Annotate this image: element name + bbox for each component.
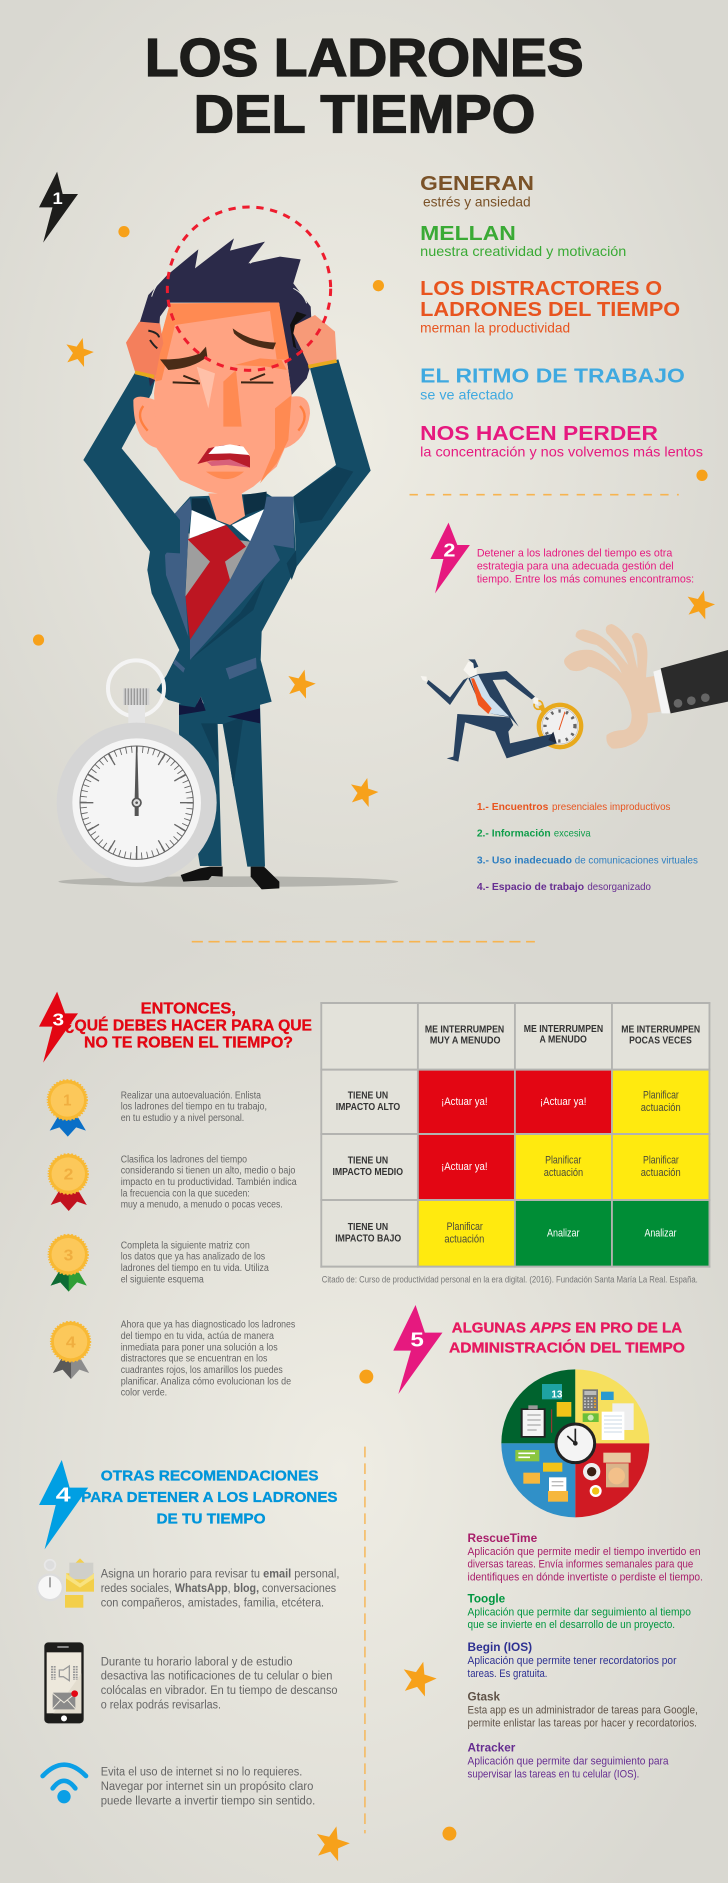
step 1 text: los ladrones del tiempo en tu trabajo,	[121, 1101, 267, 1112]
matrix column headers: ME INTERRUMPEN	[425, 1023, 504, 1035]
icon: lightning 2	[430, 523, 470, 593]
matrix row headers: IMPACTO ALTO	[336, 1101, 400, 1112]
matrix row headers: TIENE UN	[348, 1221, 388, 1232]
statement: ritmo de trabajo: se ve afectado	[420, 387, 514, 403]
list of thieves: desorganizado	[587, 881, 651, 892]
medal 4: 4	[66, 1333, 76, 1351]
statement: generan	[420, 173, 534, 210]
step 2 text: muy a menudo, a menudo o pocas veces.	[121, 1199, 283, 1210]
hands on head	[126, 312, 337, 380]
heading 4: OTRAS RECOMENDACIONES	[101, 1467, 319, 1484]
icon: lightning 2: 2	[443, 540, 455, 560]
matrix actions: Planificar	[447, 1220, 483, 1232]
tip 1 text: redes sociales, WhatsApp, blog, conversaciones	[101, 1581, 336, 1595]
vertical dashed divider	[363, 1447, 366, 1833]
heading 3	[65, 999, 312, 1052]
tip 3 text	[101, 1765, 315, 1808]
matrix column headers: ME INTERRUMPEN	[524, 1023, 603, 1034]
step 3 text	[121, 1240, 269, 1285]
decorative dots and star	[66, 226, 708, 481]
ears	[133, 396, 310, 448]
office items	[515, 1384, 634, 1502]
step 2 text: la frecuencia con la que suceden:	[121, 1188, 250, 1199]
medal 4	[51, 1322, 90, 1379]
step 1 text: en tu estudio y a nivel personal.	[121, 1113, 244, 1123]
matrix actions: actuación	[444, 1233, 484, 1245]
matrix row headers: TIENE UN	[348, 1155, 388, 1166]
stopwatch	[57, 660, 217, 883]
matrix actions: Analizar	[644, 1227, 677, 1239]
statement: mellan	[420, 223, 626, 259]
icon: watch and email	[36, 1558, 94, 1608]
matrix actions: actuación	[544, 1166, 583, 1178]
decorative stars and dot	[317, 1662, 456, 1861]
matrix column headers: A MENUDO	[540, 1034, 587, 1045]
statement: distractores	[420, 278, 680, 336]
list of thieves: 1.- Encuentros	[477, 801, 549, 812]
step 4 text	[121, 1319, 295, 1398]
section 1: title and statements	[39, 27, 708, 481]
step 4 text: color verde.	[121, 1387, 167, 1398]
step 4 text: inmediata para poner una solución a los	[121, 1342, 278, 1353]
list of thieves	[477, 801, 698, 892]
step 4 text: cuadrantes rojos, los amarillos los puedes	[121, 1365, 283, 1375]
running businessman	[421, 659, 557, 762]
icon: lightning 1	[39, 172, 78, 243]
list of thieves: excesiva	[554, 828, 591, 839]
jacket	[147, 492, 303, 723]
tip 2 text: o relax podrás revisarlas.	[101, 1698, 221, 1712]
matrix column headers	[425, 1023, 700, 1046]
icon: wifi	[43, 1765, 86, 1803]
statement: nos hacen perder	[420, 423, 703, 460]
step 4 text: Ahora que ya has diagnosticado los ladrones	[121, 1319, 295, 1330]
step 2 text: impacto en tu productividad. También indica	[121, 1177, 297, 1187]
step 2 text: considerando si tienen un alto, medio o bajo	[121, 1165, 296, 1176]
statement: generan: GENERAN	[420, 173, 534, 195]
shoes	[181, 867, 279, 889]
heading 4: PARA DETENER A LOS LADRONES	[81, 1489, 338, 1505]
matrix row headers	[332, 1090, 403, 1244]
tip 2 text	[101, 1655, 338, 1712]
section 2: common time thieves	[33, 495, 715, 942]
matrix actions: actuación	[641, 1166, 681, 1178]
step 4 text: planificar. Analiza cómo evolucionan los de	[121, 1376, 291, 1387]
statement: mellan: nuestra creatividad y motivación	[420, 244, 626, 259]
icon: lightning 5: 5	[410, 1329, 424, 1352]
icon: lightning 4: 4	[56, 1484, 71, 1507]
list of thieves: 4.- Espacio de trabajo	[477, 881, 584, 892]
matrix actions: ¡Actuar ya!	[441, 1160, 488, 1172]
app: Atracker: Atracker	[468, 1741, 516, 1755]
step 4 text: del tiempo en tu vida, actúa de manera	[121, 1331, 274, 1341]
matrix column headers: MUY A MENUDO	[430, 1035, 501, 1046]
decorative dot	[359, 1370, 373, 1384]
matrix actions: Planificar	[643, 1088, 679, 1101]
office items: 13	[551, 1389, 563, 1400]
tip 3 text: puede llevarte a invertir tiempo sin sentido.	[101, 1794, 315, 1808]
app: RescueTime: RescueTime	[468, 1532, 537, 1545]
icon: lightning 5	[393, 1305, 442, 1394]
statement: distractores: LOS DISTRACTORES O	[420, 278, 662, 300]
list of thieves: 3.- Uso inadecuado	[477, 854, 572, 866]
step 3 text: el siguiente esquema	[121, 1274, 204, 1285]
statement: ritmo de trabajo	[420, 365, 685, 403]
matrix actions: Analizar	[547, 1227, 580, 1239]
ground shadow	[58, 876, 398, 887]
grabbing hand	[564, 624, 728, 749]
list of thieves: 2.- Información	[477, 828, 551, 839]
head and arms	[83, 207, 371, 567]
icon: lightning 3: 3	[52, 1009, 64, 1030]
matrix actions: Planificar	[545, 1153, 582, 1166]
app: Begin: Begin (IOS)	[468, 1641, 532, 1654]
tip 3 text: Evita el uso de internet si no lo requieres.	[101, 1765, 302, 1779]
matrix column headers: POCAS VECES	[629, 1035, 692, 1046]
dashed red circle	[167, 207, 331, 370]
statement: nos hacen perder: NOS HACEN PERDER	[420, 423, 658, 445]
step 2 text	[121, 1154, 297, 1210]
app: Begin: tareas. Es gratuita.	[468, 1667, 547, 1679]
matrix actions: actuación	[641, 1101, 681, 1113]
matrix row headers: IMPACTO BAJO	[335, 1233, 401, 1244]
list of thieves: presenciales improductivos	[552, 801, 670, 812]
app: Gtask: Gtask	[468, 1690, 501, 1704]
statement: mellan: MELLAN	[420, 223, 516, 245]
heading 4	[81, 1467, 338, 1527]
heading 3: ENTONCES,	[141, 999, 236, 1017]
tip 2 text: colócalas en vibrador. En tu tiempo de descanso	[101, 1683, 338, 1697]
medal 3: 3	[64, 1246, 73, 1264]
heading 5: ALGUNAS APPS EN PRO DE LA	[452, 1319, 682, 1336]
medal 1	[48, 1080, 87, 1137]
priority matrix table	[320, 1002, 710, 1268]
step 2 text: Clasifica los ladrones del tiempo	[121, 1154, 247, 1165]
app: Begin	[468, 1641, 677, 1679]
section 3: what to do	[39, 992, 710, 1398]
icon: lightning 4	[39, 1460, 88, 1549]
illustration: hand chasing running businessman	[421, 624, 728, 762]
pocket watch	[534, 701, 583, 749]
section 4 and apps	[39, 1447, 703, 1861]
app: Toogle	[468, 1592, 691, 1630]
app: Toogle: Toogle	[468, 1592, 505, 1606]
icon: smartphone	[44, 1642, 84, 1723]
matrix actions	[441, 1088, 681, 1245]
heading 3: NO TE ROBEN EL TIEMPO?	[84, 1034, 293, 1052]
app: Gtask	[468, 1690, 698, 1729]
matrix actions: Planificar	[643, 1153, 679, 1166]
icon: lightning 1: 1	[52, 190, 63, 208]
title	[145, 27, 584, 144]
tip 3 text: Navegar por internet sin un propósito claro	[101, 1779, 313, 1793]
heading 4: DE TU TIEMPO	[156, 1510, 266, 1527]
matrix actions: ¡Actuar ya!	[540, 1095, 586, 1107]
heading 3: ¿QUÉ DEBES HACER PARA QUE	[65, 1016, 312, 1035]
title: LOS LADRONES	[145, 27, 584, 88]
trousers	[179, 703, 265, 867]
app: Atracker	[468, 1741, 669, 1780]
hair	[140, 238, 313, 395]
man with stopwatch illustration	[57, 207, 398, 889]
matrix actions: ¡Actuar ya!	[441, 1095, 488, 1107]
step 3 text: los datos que ya has analizado de los	[121, 1251, 265, 1262]
apps pie illustration	[501, 1369, 649, 1517]
heading 5	[449, 1319, 685, 1356]
face	[154, 303, 292, 497]
tip 2 text: desactiva las notificaciones de tu celular o bien	[101, 1669, 332, 1683]
tip 1 text: Asigna un horario para revisar tu email personal,	[101, 1567, 339, 1581]
step 1 text: Realizar una autoevaluación. Enlista	[121, 1090, 261, 1101]
medal 2: 2	[64, 1166, 73, 1183]
tip 1 text: con compañeros, amistades, familia, etcétera.	[101, 1596, 324, 1610]
pie quadrants	[501, 1369, 649, 1517]
medal 1: 1	[63, 1092, 72, 1109]
tip 2 text: Durante tu horario laboral y de estudio	[101, 1655, 293, 1669]
decorative stars	[33, 590, 715, 807]
medal 2	[49, 1154, 88, 1211]
step 4 text: distractores que se encuentran en los	[121, 1353, 268, 1364]
icon: lightning 3	[39, 992, 78, 1063]
step 3 text: Completa la siguiente matriz con	[121, 1240, 250, 1251]
matrix row headers: IMPACTO MEDIO	[332, 1166, 403, 1177]
statement: distractores: merman la productividad	[420, 320, 570, 336]
matrix cells	[320, 1002, 710, 1268]
left sleeve	[83, 373, 180, 553]
statement: generan: estrés y ansiedad	[423, 194, 531, 210]
title: DEL TIEMPO	[194, 84, 535, 144]
intro paragraph	[477, 547, 694, 585]
step 3 text: ladrones del tiempo en tu vida. Utiliza	[121, 1263, 269, 1273]
app: RescueTime	[468, 1532, 703, 1583]
section 4 icons	[36, 1558, 94, 1803]
medal 3	[49, 1235, 88, 1292]
right sleeve	[293, 359, 371, 567]
step 1 text	[121, 1090, 267, 1123]
lower body and stopwatch	[57, 492, 398, 889]
matrix row headers: TIENE UN	[348, 1090, 388, 1101]
tip 1 text	[101, 1567, 339, 1610]
clock	[556, 1424, 595, 1463]
